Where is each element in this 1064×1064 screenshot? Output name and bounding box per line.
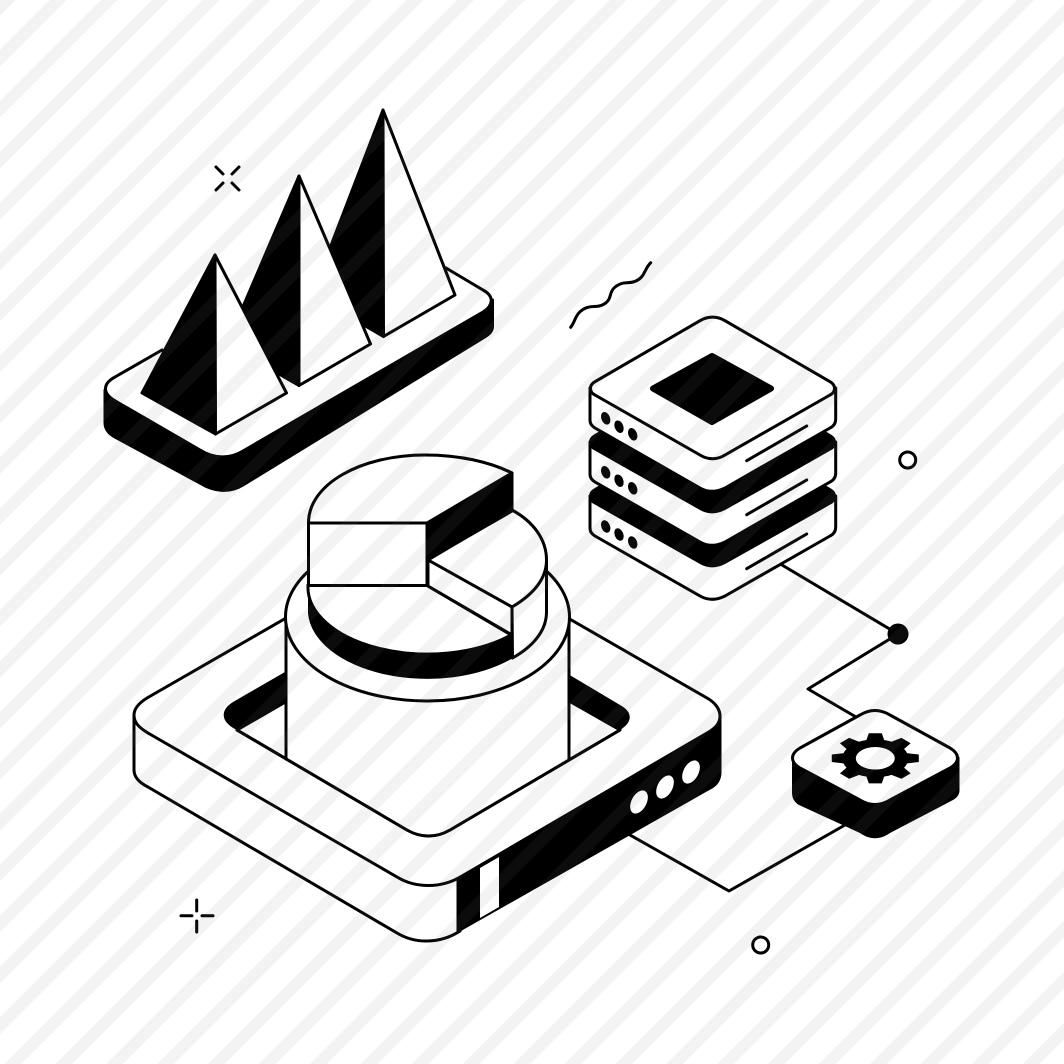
middle server unit bbox=[590, 371, 836, 545]
pie chart bbox=[308, 455, 546, 679]
chip square on top server bbox=[653, 356, 771, 422]
pyramid chart on platform bbox=[105, 110, 492, 490]
pie raised slice top bbox=[308, 455, 512, 523]
platform left side bbox=[134, 715, 480, 941]
squiggle accent bbox=[571, 263, 651, 327]
short pyramid bbox=[142, 255, 286, 434]
pie right slice wall bbox=[512, 560, 546, 658]
connector: server to gear block with node bbox=[782, 565, 908, 717]
pie lower wall bbox=[308, 585, 513, 679]
platform opening bbox=[224, 590, 630, 836]
server stack bbox=[590, 317, 836, 599]
pie raised slice front bbox=[308, 523, 427, 586]
platform right side in black bbox=[458, 716, 720, 931]
tall pyramid bbox=[312, 110, 455, 336]
bottom server unit bbox=[590, 425, 836, 599]
cylinder rim bbox=[286, 533, 570, 701]
gear icon bbox=[832, 733, 919, 783]
gear block top bbox=[792, 710, 958, 804]
central platform with pie chart bbox=[134, 455, 720, 941]
pie right slice surface bbox=[428, 510, 546, 607]
small ring bottom bbox=[753, 937, 769, 953]
ports on platform side bbox=[627, 757, 703, 817]
connector: platform to gear block bbox=[630, 825, 845, 891]
pie lower slice surface bbox=[308, 585, 511, 654]
top server unit bbox=[590, 317, 836, 491]
pie raised slice black wall bbox=[427, 473, 512, 560]
white stripe on platform side bbox=[480, 857, 499, 918]
cylinder pedestal bbox=[286, 534, 569, 836]
platform top surface bbox=[134, 537, 720, 886]
gear block bbox=[792, 710, 960, 838]
middle pyramid bbox=[227, 176, 370, 386]
cross sparkle bbox=[216, 167, 239, 190]
small ring right bbox=[900, 452, 916, 468]
pie right slice front bbox=[428, 560, 512, 635]
pyramid platform top bbox=[105, 200, 491, 457]
pyramid platform base bbox=[105, 300, 492, 490]
gear block body bbox=[792, 757, 960, 838]
plus sparkle bbox=[181, 900, 213, 932]
